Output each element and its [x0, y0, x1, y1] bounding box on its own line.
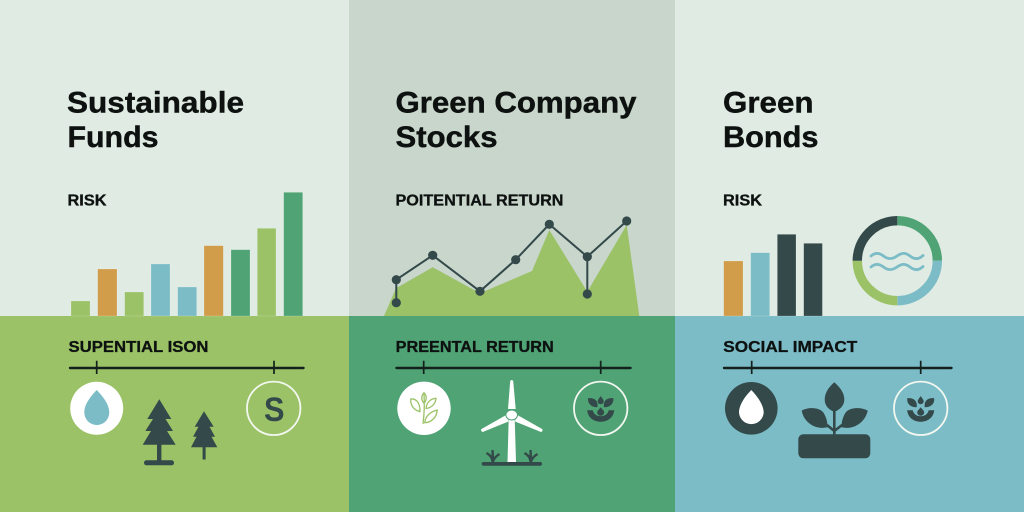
icon: leaf sprig — [397, 382, 451, 435]
bar chart: risk — [71, 192, 303, 316]
icon: large tree — [143, 399, 176, 465]
heading: green company stocks — [396, 86, 637, 154]
label: risk: RISK — [723, 192, 762, 210]
label: supential ison: SUPENTIAL ISON — [68, 339, 208, 356]
scale line — [396, 361, 630, 374]
icon: seedling badge — [894, 382, 947, 435]
scale line — [70, 361, 304, 374]
label: preental return: PREENTAL RETURN — [396, 339, 554, 356]
heading: green company stocks: Green Company — [396, 86, 637, 119]
icon: wind turbine — [481, 380, 543, 466]
heading: green bonds: Green — [723, 86, 814, 119]
label: potential return: POITENTIAL RETURN — [396, 192, 564, 209]
heading: green company stocks: Stocks — [396, 121, 498, 154]
icon: plant in planter — [798, 382, 870, 458]
icon: s coin — [247, 382, 300, 435]
label: social impact: SOCIAL IMPACT — [723, 339, 858, 356]
heading: sustainable funds — [67, 86, 244, 154]
heading: green bonds: Bonds — [723, 121, 818, 154]
heading: sustainable funds: Sustainable — [67, 86, 244, 119]
heading: green bonds — [723, 86, 818, 154]
icon: s coin: S — [264, 391, 284, 429]
heading: sustainable funds: Funds — [68, 121, 158, 154]
scale line — [724, 361, 952, 374]
icon: water drop — [70, 382, 123, 435]
label: risk: RISK — [68, 192, 107, 210]
panel: sustainable funds — [0, 0, 349, 512]
icon: seedling badge — [574, 382, 627, 435]
panel: green company stocks — [349, 0, 675, 512]
area and line chart — [384, 216, 639, 316]
donut chart with waves — [857, 221, 937, 301]
panel: green bonds — [675, 0, 1024, 512]
icon: small tree — [191, 411, 217, 460]
icon: oil drop — [725, 382, 778, 435]
bar chart: risk — [724, 234, 822, 316]
